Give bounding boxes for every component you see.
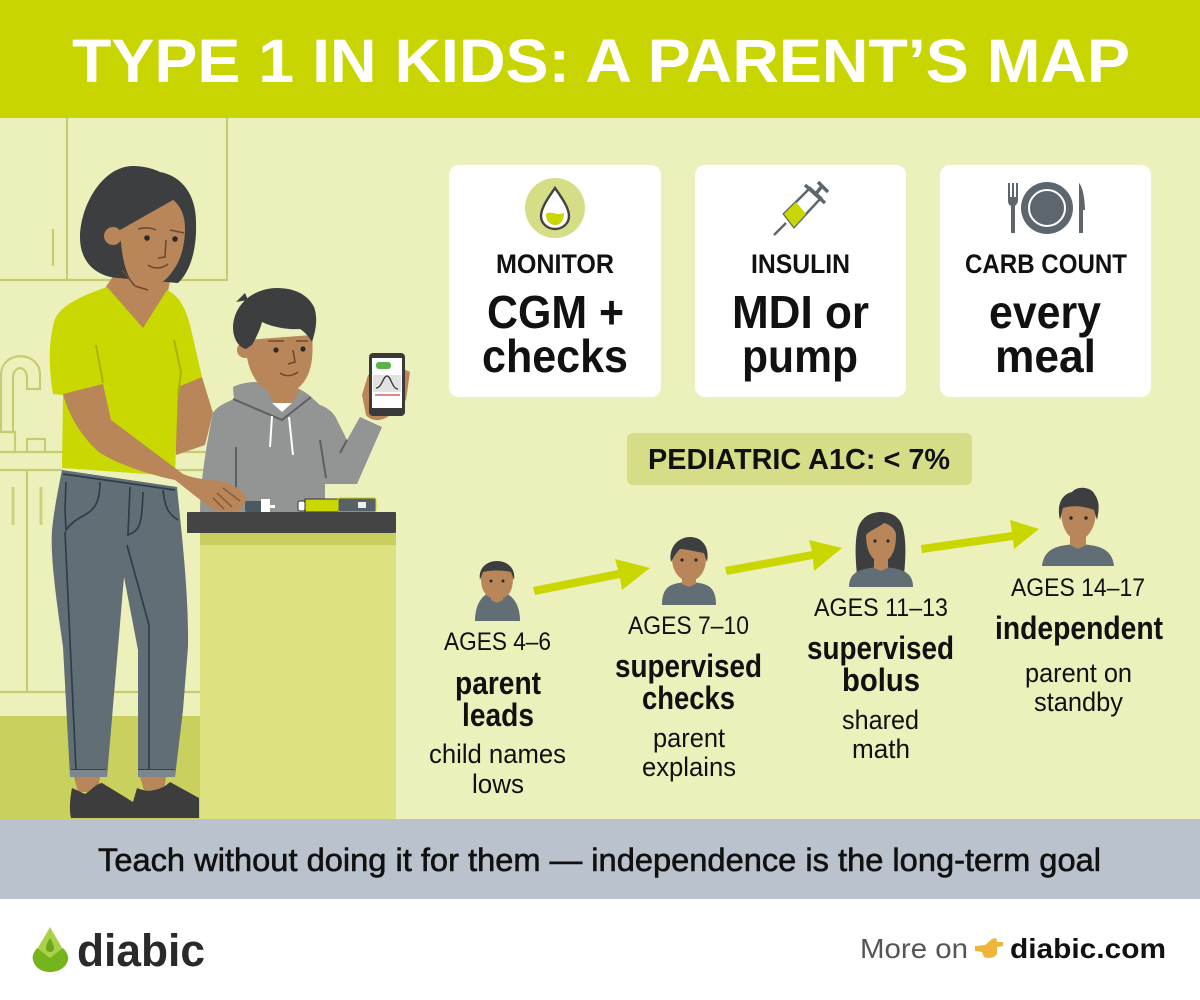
note: parent on [1025,658,1132,688]
value [732,286,869,382]
link: more on diabic.com [860,933,1166,964]
face [120,200,185,287]
arrow: stage 3 to 4 [921,520,1039,553]
banner: key message [0,819,1200,899]
role: supervised [615,648,762,684]
icon: plate and cutlery [1008,182,1085,234]
cuffs [70,770,175,777]
card: insulin [695,165,906,397]
value [482,286,628,382]
hoodie [200,382,382,512]
hair back [80,166,196,283]
value: pump [742,330,858,382]
hand [362,365,410,420]
stage: ages 4-6 [429,561,566,799]
avatar [1042,488,1114,566]
avatar [662,537,716,605]
title: TYPE 1 IN KIDS: A PARENT’S MAP [72,27,1130,95]
role: bolus [842,662,920,698]
front arm [63,384,247,512]
stage: ages 11-13 [807,512,954,764]
note [642,723,736,782]
wordmark: diabic [77,925,205,976]
card: monitor [449,165,661,397]
note: parent [653,723,725,753]
role [455,665,541,733]
jeans [52,470,188,777]
note: explains [642,752,736,782]
arrow: stage 2 to 3 [725,540,842,575]
age: AGES 14–17 [1011,574,1145,602]
note [842,705,919,764]
ankles [74,777,166,792]
stage: ages 7-10 [615,537,762,782]
background panel [0,118,1200,820]
note: lows [472,769,524,799]
neck [105,262,172,332]
card: carb count [940,165,1151,397]
illustration: boy with phone [200,288,410,512]
age: AGES 4–6 [444,628,551,656]
avatar [849,512,913,587]
stage: ages 14-17 [995,488,1163,717]
value: checks [482,330,628,382]
phone [369,353,405,416]
note: math [852,734,910,764]
value [989,286,1101,382]
back arm [175,377,213,455]
A1C target pill: PEDIATRIC A1C: < 7% [648,444,950,476]
icon: pointing hand [975,938,1003,958]
role [615,648,762,716]
role: supervised [807,630,954,666]
value: meal [995,330,1096,382]
hair [233,288,316,349]
note: child names [429,739,566,769]
note: standby [1034,687,1123,717]
role: independent [995,610,1163,646]
note: shared [842,705,919,735]
illustration: insulin pens and counter top [187,498,396,533]
note [1025,658,1132,717]
value: CGM + [487,286,624,338]
face [246,335,313,394]
age: AGES 7–10 [628,612,749,640]
value: MDI or [732,286,869,338]
role [807,630,954,698]
shirt [50,287,202,476]
link: more on diabic.com: diabic.com [1010,933,1166,964]
logo: diabic [33,925,205,976]
link: more on diabic.com: More on [860,933,968,964]
avatar [475,561,520,621]
value: every [989,286,1101,338]
label: CARB COUNT [965,249,1127,279]
A1C target pill [627,433,972,485]
illustration: mother [50,166,247,818]
role: leads [462,697,534,733]
label: MONITOR [496,249,614,279]
illustration: counter [200,533,396,819]
role: parent [455,665,541,701]
arrow: stage 1 to 2 [533,559,650,595]
note [429,739,566,799]
icon: green leaf drop [33,927,68,972]
shoes [70,782,199,818]
label: INSULIN [751,249,850,279]
icon: blood drop [525,178,585,238]
banner: key message: Teach without doing it for them — independence is the long-term goal [98,842,1101,878]
role: checks [642,680,735,716]
kitchen background [0,118,228,819]
age: AGES 11–13 [814,594,948,622]
header band [0,0,1200,118]
icon: syringe [774,182,828,235]
